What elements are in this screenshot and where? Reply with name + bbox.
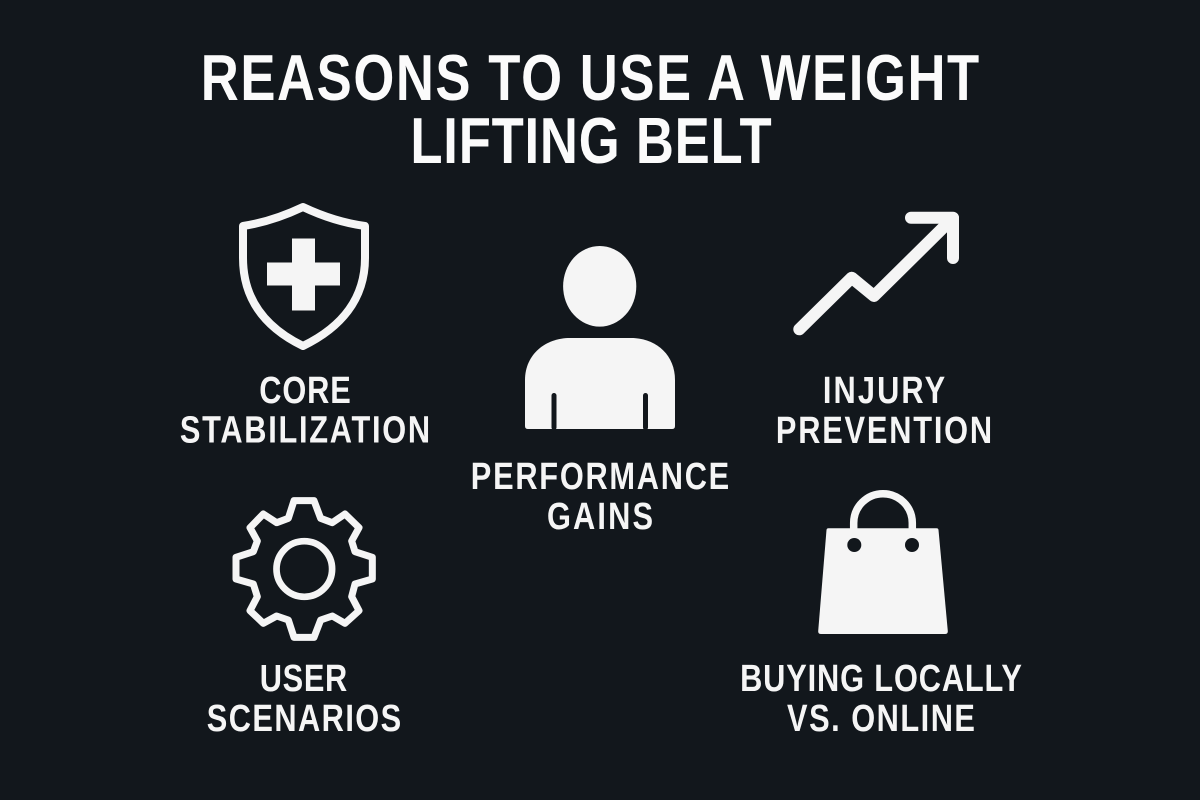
icon: shield with cross xyxy=(243,207,365,346)
label: buying locally vs. online: VS. ONLINE xyxy=(787,698,975,740)
label: core stabilization: STABILIZATION xyxy=(180,410,430,451)
label: user scenarios xyxy=(207,658,401,740)
label: buying locally vs. online xyxy=(740,658,1022,740)
title xyxy=(201,41,979,177)
label: injury prevention xyxy=(776,370,992,452)
label: core stabilization: CORE xyxy=(259,370,351,412)
label: injury prevention: INJURY xyxy=(823,370,945,412)
label: performance gains: PERFORMANCE xyxy=(471,456,729,498)
icon: person xyxy=(525,246,675,430)
title: LIFTING BELT xyxy=(410,104,772,177)
icon: gear xyxy=(236,501,372,637)
label: user scenarios: USER xyxy=(260,658,347,700)
label: injury prevention: PREVENTION xyxy=(776,410,992,452)
label: core stabilization xyxy=(180,370,430,451)
label: performance gains: GAINS xyxy=(547,496,653,538)
title: REASONS TO USE A WEIGHT xyxy=(201,41,979,114)
label: user scenarios: SCENARIOS xyxy=(207,698,401,740)
icon: shopping bag xyxy=(818,494,948,634)
label: buying locally vs. online: BUYING LOCALLY xyxy=(740,658,1022,700)
icon: rising arrow xyxy=(799,218,953,329)
label: performance gains xyxy=(471,456,729,538)
